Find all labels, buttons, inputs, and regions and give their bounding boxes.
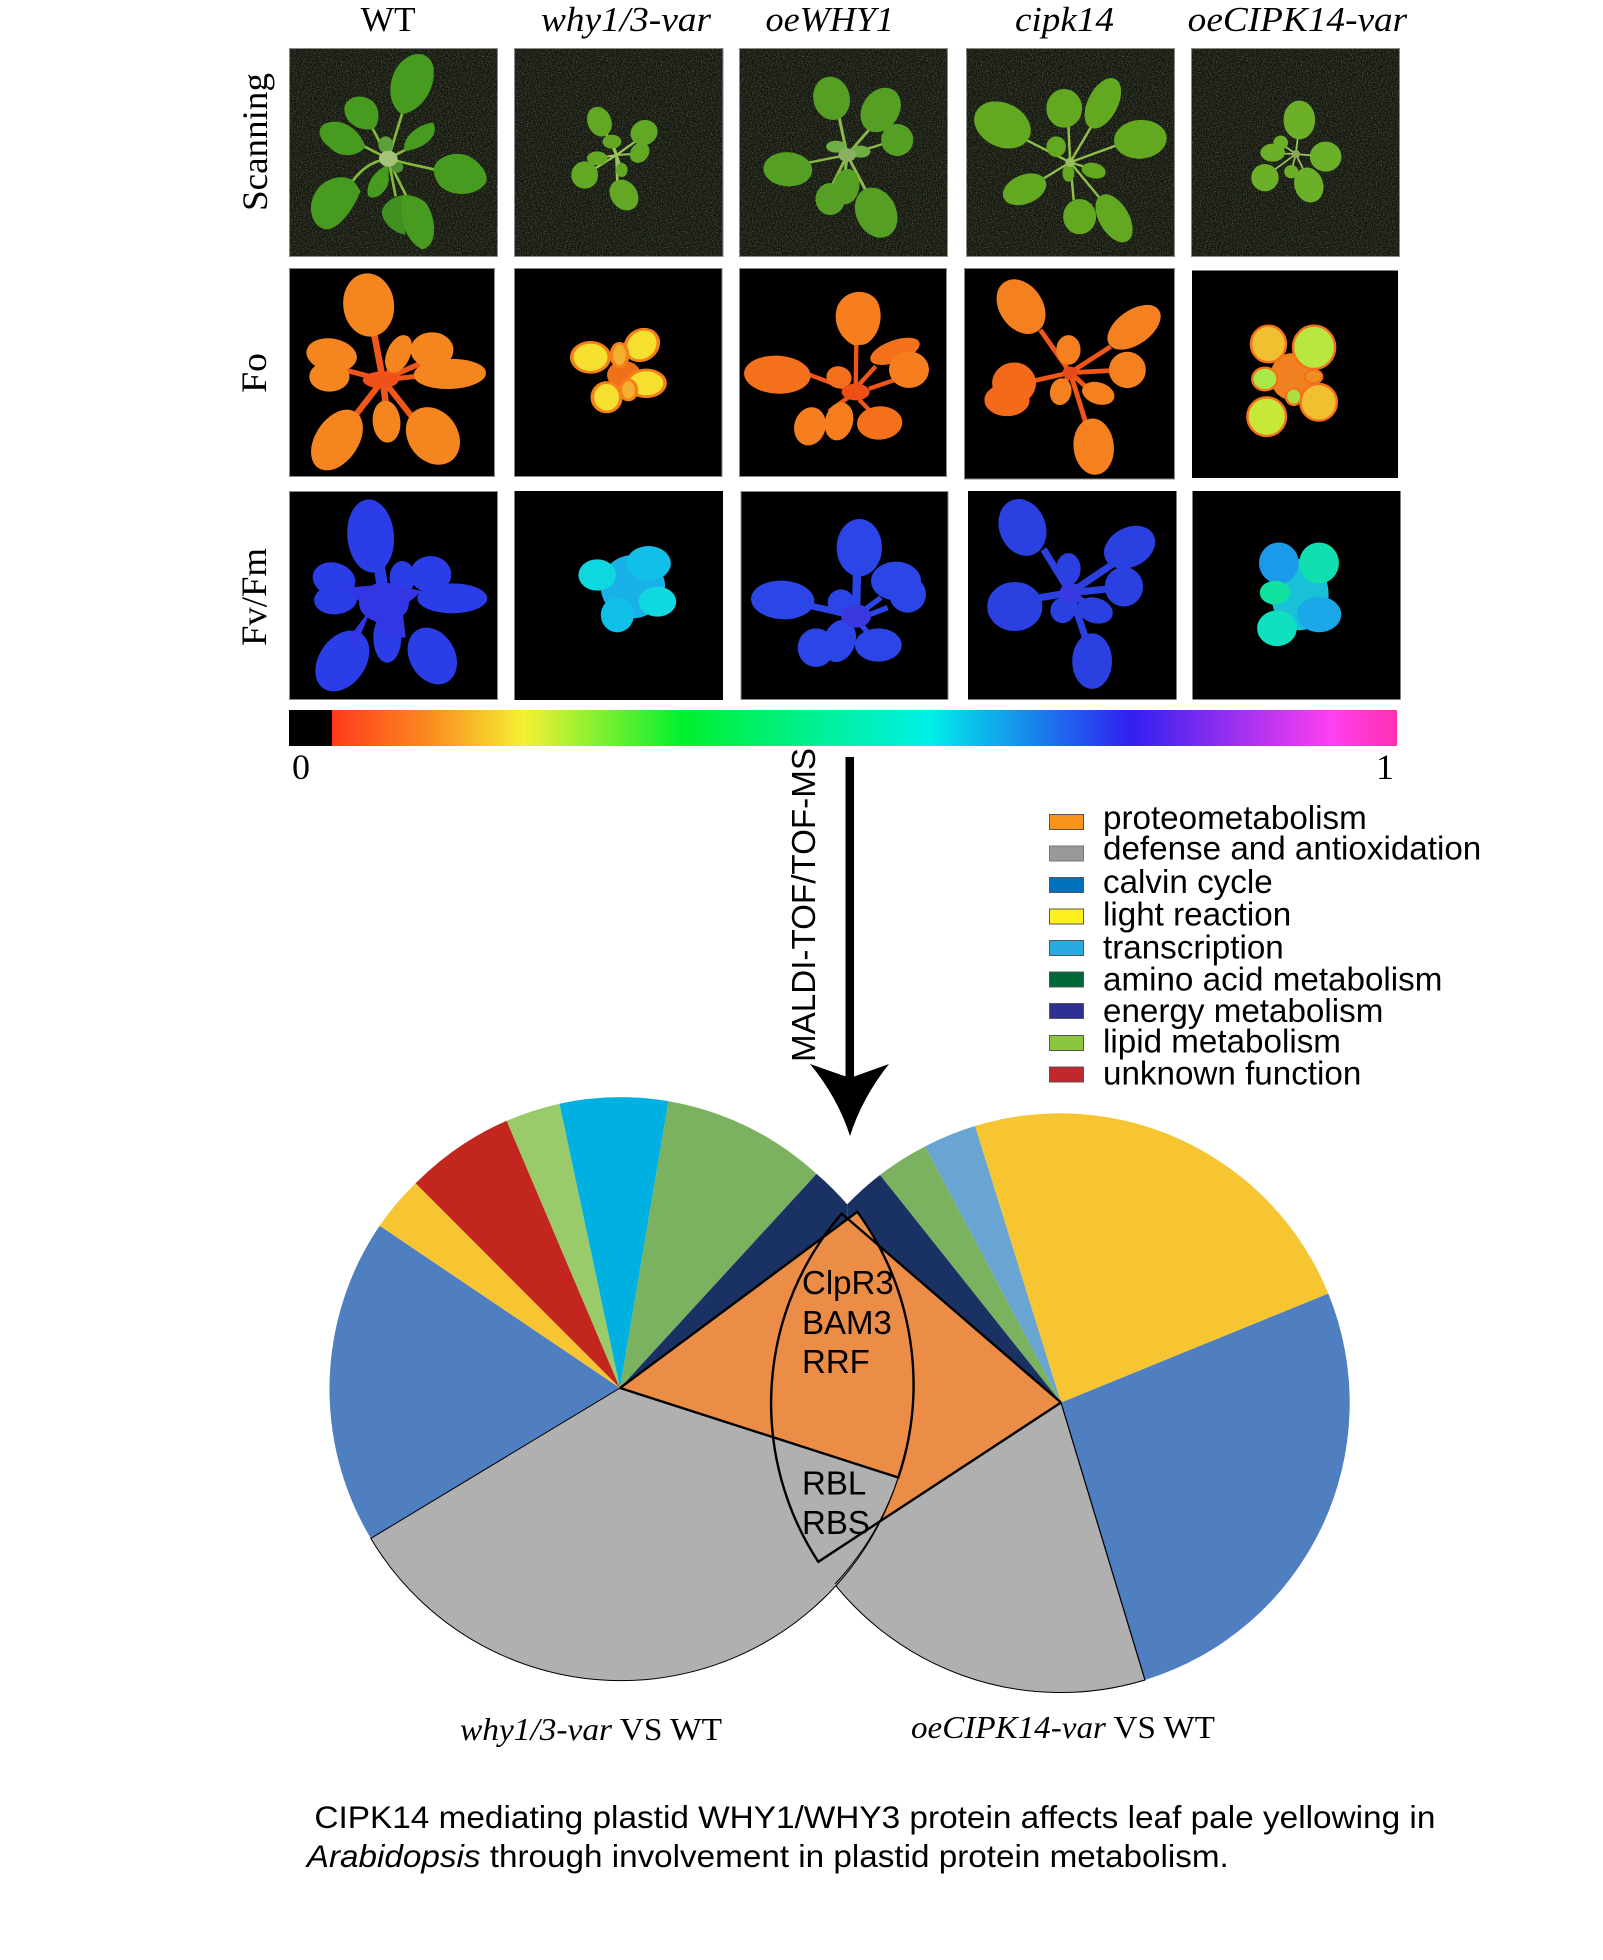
overlap wedge outlines xyxy=(620,1212,1061,1584)
legend: defense and antioxidation xyxy=(1103,831,1481,868)
panel: Scanning oeCIPK14-var xyxy=(1192,48,1400,256)
row labels: Fv/Fm xyxy=(234,548,274,646)
panel: Fo WT xyxy=(290,268,494,476)
column headers: oeCIPK14-var xyxy=(1188,0,1408,39)
legend: lipid metabolism xyxy=(1103,1024,1341,1061)
column headers xyxy=(361,0,1408,39)
scale label: 0: 0 xyxy=(292,747,310,787)
panel: Fv/Fm WT xyxy=(290,492,498,702)
panel: Fv/Fm why1/3-var xyxy=(514,491,723,700)
panel: Fo why1/3-var xyxy=(514,268,722,476)
column headers: cipk14 xyxy=(1015,0,1114,39)
column headers: oeWHY1 xyxy=(766,0,894,39)
panel: Fv/Fm oeWHY1 xyxy=(741,492,948,700)
overlap proteins: RBS xyxy=(802,1504,870,1541)
panel: Fo cipk14 xyxy=(964,268,1174,479)
panel: Fo oeCIPK14-var xyxy=(1192,270,1398,478)
left pie caption: why1/3-var VS WT xyxy=(460,1711,722,1747)
row labels xyxy=(234,73,275,646)
colour scale bar xyxy=(289,710,1397,746)
legend: energy metabolism xyxy=(1103,993,1383,1030)
legend: light reaction xyxy=(1103,896,1291,934)
panel: Fv/Fm cipk14 xyxy=(968,491,1176,700)
legend xyxy=(1050,800,1481,1092)
overlap proteins: ClpR3 xyxy=(802,1264,894,1301)
right pie caption: oeCIPK14-var VS WT xyxy=(911,1709,1215,1745)
panel: Scanning cipk14 xyxy=(966,48,1174,256)
conclusion text: CIPK14 mediating plastid WHY1/WHY3 protein affects leaf pale yellowing in xyxy=(314,1799,1435,1835)
legend: unknown function xyxy=(1103,1056,1361,1092)
legend: transcription xyxy=(1103,930,1284,966)
overlap proteins: BAM3 xyxy=(802,1304,892,1341)
panel: Scanning WT xyxy=(290,48,498,256)
column headers: WT xyxy=(361,0,416,39)
panel: Scanning oeWHY1 xyxy=(740,48,948,256)
overlap proteins: RRF xyxy=(802,1343,870,1380)
conclusion text: Arabidopsis through involvement in plastid protein metabolism. xyxy=(305,1838,1229,1874)
right pie: oeCIPK14-var VS WT xyxy=(771,1113,1350,1693)
arrow xyxy=(810,757,889,1136)
panel: Fo oeWHY1 xyxy=(740,268,946,476)
column headers: why1/3-var xyxy=(541,0,711,39)
method label: MALDI-TOF/TOF-MS xyxy=(785,748,822,1062)
legend: amino acid metabolism xyxy=(1103,962,1442,998)
conclusion text xyxy=(305,1799,1435,1874)
overlap proteins: RBL xyxy=(802,1465,866,1502)
row labels: Scanning xyxy=(235,73,275,211)
scale label: 1: 1 xyxy=(1376,747,1394,787)
row labels: Fo xyxy=(234,353,274,393)
left pie: why1/3-var VS WT xyxy=(329,1097,914,1681)
overlap proteins xyxy=(802,1264,894,1541)
panel: Scanning why1/3-var xyxy=(514,48,723,256)
legend: proteometabolism xyxy=(1103,800,1367,837)
legend: calvin cycle xyxy=(1103,864,1273,901)
panel: Fv/Fm oeCIPK14-var xyxy=(1192,491,1400,700)
